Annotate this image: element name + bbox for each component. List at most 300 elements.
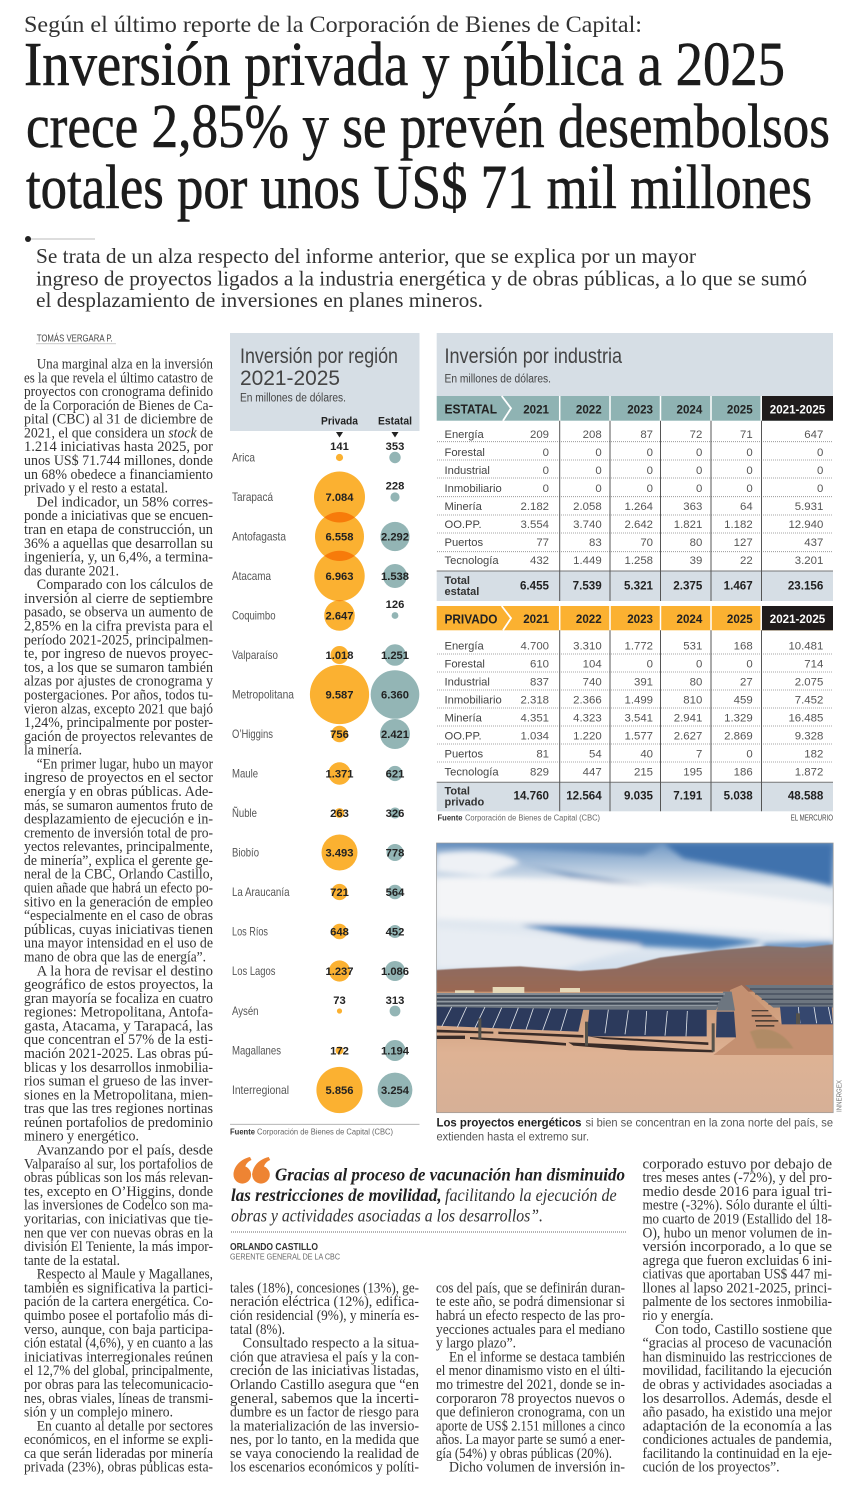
industry source and credit: Corporación de Bienes de Capital (CBC): [465, 813, 600, 823]
industry panel header: Inversión por industria: [444, 345, 622, 368]
table: privado: Inmobiliario: [444, 694, 502, 706]
table: estatal: 363: [683, 501, 702, 513]
table: privado: Total: [444, 786, 470, 798]
table: privado: 12.564: [566, 790, 602, 802]
region panel header: En millones de dólares.: [240, 393, 346, 405]
bubble values: 126: [386, 599, 404, 611]
table: estatal: 0: [746, 447, 753, 459]
table: estatal: 209: [530, 429, 549, 441]
bubble values: 1.086: [381, 966, 409, 978]
table: privado: 740: [583, 676, 602, 688]
table: privado: 80: [690, 676, 702, 688]
article column 1: “especialmente en el caso de obras: [24, 908, 213, 924]
bubble values: 452: [386, 926, 404, 938]
table: estatal: 2021-2025: [770, 403, 826, 416]
photo caption: extienden hasta el extremo sur.: [436, 1130, 589, 1144]
article column 1: quien añade que habrá un efecto po-: [24, 880, 213, 896]
article column 1: te, por ingreso de nuevos proyec-: [24, 646, 213, 662]
article column 1: regiones: Metropolitana, Antofa-: [24, 1005, 213, 1021]
bubble values: 9.587: [326, 689, 354, 701]
region panel header: 2021-2025: [240, 367, 340, 390]
bubble row: Magallanes: [232, 1040, 406, 1061]
table: privado: 391: [634, 676, 653, 688]
table: privado: 2021-2025: [770, 613, 826, 626]
article column 1: Comparado con los cálculos de: [37, 577, 213, 593]
bubble row: Coquimbo: Coquimbo: [232, 608, 276, 622]
bubble row: O'Higgins: O’Higgins: [232, 727, 273, 741]
article column 1: iniciativas interregionales reúnen: [24, 1349, 213, 1365]
article column 1: En cuanto al detalle por sectores: [37, 1418, 213, 1434]
table: privado: 195: [683, 766, 702, 778]
article column 3: corporaron 78 proyectos nuevos o: [436, 1391, 625, 1407]
table: privado: 0: [746, 748, 753, 760]
table: estatal: 0: [543, 483, 549, 495]
article column 1: cremento de inversión total de pro-: [24, 825, 213, 841]
article column 2: ción que atraviesa el país y la con-: [230, 1349, 419, 1365]
article column 1: tran en etapa de construcción, un: [24, 522, 213, 538]
bubble row: Atacama: [232, 551, 407, 601]
quote text: Gracias al proceso de vacunación han disminuido: [275, 1165, 625, 1185]
table: privado: 0: [696, 658, 702, 670]
table: estatal: 1.182: [724, 519, 753, 531]
table: estatal: 0: [817, 483, 823, 495]
table: privado: 447: [583, 766, 602, 778]
article column 1: nen que ver con nuevas obras en la: [24, 1225, 214, 1241]
article column 1: energía y en obras públicas. Ade-: [24, 784, 213, 800]
table: privado: Industrial: [444, 676, 490, 688]
table: privado: 837: [530, 676, 549, 688]
bubble values: 263: [330, 808, 349, 820]
article column 1: también es significativa la partici-: [24, 1280, 213, 1296]
article column 1: desplazamiento de ejecución e in-: [24, 812, 213, 828]
table: estatal: 0: [696, 483, 702, 495]
region source: [230, 1124, 420, 1137]
article column 2: tatal (8%).: [230, 1322, 285, 1338]
bubble values: 564: [386, 887, 405, 899]
icon: quote marks: [234, 1157, 270, 1184]
article column 1: blicas y los desarrollos inmobilia-: [24, 1060, 213, 1076]
table: privado: privado: [444, 797, 485, 809]
bubble values: 3.493: [326, 847, 354, 859]
article column 4: medio desde 2016 para igual tri-: [642, 1184, 832, 1200]
bubble values: 1.251: [381, 650, 409, 662]
table: privado: Forestal: [444, 658, 485, 670]
table: privado: 0: [746, 658, 753, 670]
article column 1: por obras para las telecomunicacio-: [24, 1377, 213, 1393]
article column 1: Una marginal alza en la inversión: [37, 356, 213, 372]
byline: TOMÁS VERGARA P.: [37, 331, 113, 344]
table: estatal: Forestal: [444, 447, 485, 459]
bubble values: 2.292: [381, 531, 409, 543]
deck: Se trata de un alza respecto del informe anterior, que se explica por un mayor: [36, 244, 696, 268]
table: privado: 9.035: [624, 790, 654, 802]
table: estatal: 0: [817, 447, 823, 459]
article column 2: creción de las iniciativas listadas,: [230, 1363, 419, 1379]
article column 4: los desarrollos. Además, desde el: [642, 1391, 832, 1407]
table: privado: 7.452: [795, 694, 823, 706]
article column 1: división El Teniente, la más impor-: [24, 1239, 213, 1255]
table: estatal: OO.PP.: [444, 519, 482, 531]
article column 1: nes, obras viales, líneas de transmi-: [24, 1391, 213, 1407]
table: estatal: 5.321: [624, 580, 654, 592]
table: privado: 829: [530, 766, 549, 778]
article column 1: alzas por ajustes de cronograma y: [24, 674, 214, 690]
bubble values: 7.084: [326, 492, 354, 504]
bubble row: Biobío: Biobío: [232, 846, 259, 860]
table: privado: 1.872: [795, 766, 823, 778]
article column 1: 1.214 iniciativas hasta 2025, por: [24, 439, 213, 455]
table: estatal: 0: [595, 447, 602, 459]
table: privado: 810: [683, 694, 702, 706]
table: estatal: 5.931: [795, 501, 823, 513]
article column 1: gación de proyectos relevantes de: [24, 729, 213, 745]
article column 3: En el informe se destaca también: [449, 1349, 625, 1365]
industry panel header: En millones de dólares.: [444, 374, 551, 386]
bubble row: Maule: [232, 762, 403, 785]
table: privado: 1.329: [724, 712, 753, 724]
bubble row: Maule: Maule: [232, 766, 258, 780]
table: privado: 4.700: [520, 640, 549, 652]
table: privado: 182: [804, 748, 823, 760]
region source: Fuente: [230, 1127, 255, 1137]
article column 1: sitivo en la generación de empleo: [24, 894, 213, 910]
table: estatal: 7.539: [573, 580, 602, 592]
table: estatal: [437, 396, 833, 601]
article column 1: 1,24%, principalmente por poster-: [24, 715, 213, 731]
article column 1: siones en la Metropolitana, mien-: [24, 1087, 213, 1103]
table: estatal: 0: [595, 465, 602, 477]
article column 4: “gracias al proceso de vacunación: [642, 1336, 832, 1352]
article column 1: mano de obra que las de energía”.: [24, 950, 206, 966]
table: privado: 7.191: [673, 790, 703, 802]
article column 1: “En primer lugar, hubo un mayor: [37, 756, 213, 772]
table: privado: Puertos: [444, 748, 483, 760]
article column 1: de la Corporación de Bienes de Ca-: [24, 398, 213, 414]
table: estatal: 2021: [523, 403, 550, 416]
photo caption: [436, 1116, 833, 1144]
article column 3: [436, 1280, 625, 1476]
bubble values: 1.237: [326, 966, 354, 978]
table: privado: 3.310: [573, 640, 602, 652]
article column 1: quimbo posee el portafolio más di-: [24, 1308, 213, 1324]
photo: solar plant in the desert: [436, 843, 833, 1115]
table: estatal: 0: [647, 447, 653, 459]
table: privado: 186: [734, 766, 753, 778]
bubble row: Metropolitana: Metropolitana: [232, 688, 294, 702]
table: privado: 2.366: [573, 694, 602, 706]
article column 3: habrá un efecto respecto de las pro-: [436, 1308, 625, 1324]
bubble row: Valparaíso: Valparaíso: [232, 648, 278, 662]
table: privado: 104: [583, 658, 602, 670]
table: estatal: 23.156: [788, 580, 824, 592]
table: estatal: estatal: [444, 586, 479, 598]
table: privado: 27: [740, 676, 753, 688]
bubble values: 6.963: [326, 571, 354, 583]
article column 1: verso, aunque, con baja participa-: [24, 1322, 213, 1338]
table: estatal: 80: [690, 537, 702, 549]
bubble row: Los Ríos: Los Ríos: [232, 924, 268, 938]
article column 1: Avanzando por el país, desde: [37, 1142, 213, 1158]
article column 4: llones al lapso 2021-2025, princi-: [642, 1280, 832, 1296]
table: privado: 2025: [727, 613, 753, 626]
table: estatal: 70: [640, 537, 653, 549]
article column 4: corporado estuvo por debajo de: [642, 1156, 832, 1172]
table: privado: 2022: [576, 613, 602, 626]
article column 2: los escenarios económicos y políti-: [230, 1460, 419, 1476]
article column 1: ca que serán lideradas por minería: [24, 1446, 214, 1462]
bubble row: O'Higgins: [232, 719, 410, 749]
table: estatal: Inmobiliario: [444, 483, 502, 495]
bubble row: Aysén: Aysén: [232, 1004, 258, 1018]
bubble row: Tarapacá: Tarapacá: [232, 490, 273, 504]
region panel header: Estatal: [378, 416, 412, 428]
article column 1: de minería”, explica el gerente ge-: [24, 853, 213, 869]
table: estatal: 0: [543, 465, 549, 477]
photo caption: Los proyectos energéticos: [436, 1116, 582, 1130]
article column 1: ingreso de proyectos en el sector: [24, 770, 213, 786]
table: privado: 7: [696, 748, 702, 760]
bubble row: Los Lagos: [232, 960, 405, 982]
callout: quote: [230, 1157, 626, 1261]
table: estatal: Industrial: [444, 465, 490, 477]
table: privado: 4.351: [520, 712, 549, 724]
bubble row: Los Ríos: [232, 924, 402, 939]
table: estatal: 71: [740, 429, 753, 441]
article column 4: versión incorporado, a lo que se: [642, 1239, 832, 1255]
table: estatal: 72: [690, 429, 702, 441]
table: estatal: 1.264: [624, 501, 653, 513]
article column 1: gasta, Atacama, y Tarapacá, las: [24, 1018, 214, 1034]
table: privado: 2.318: [520, 694, 549, 706]
table: privado: 714: [804, 658, 823, 670]
table: privado: 14.760: [514, 790, 549, 802]
article column 1: pasado, se observa un aumento de: [24, 605, 213, 621]
article column 2: tales (18%), concesiones (13%), ge-: [230, 1280, 419, 1296]
deck: el desplazamiento de inversiones en planes mineros.: [36, 288, 483, 312]
table: privado: 2.941: [674, 712, 702, 724]
article column 1: yoritarias, con iniciativas que tie-: [24, 1212, 213, 1228]
table: privado: 215: [634, 766, 653, 778]
bubble row: Aysén: [232, 1004, 400, 1018]
table: estatal: 83: [589, 537, 602, 549]
article column 3: Dicho volumen de inversión in-: [449, 1460, 625, 1476]
bubble values: 6.558: [326, 531, 354, 543]
table: estatal: 1.449: [573, 555, 602, 567]
bubble values: 172: [330, 1045, 349, 1057]
table: estatal: Puertos: [444, 537, 483, 549]
article column 1: rios suman el grueso de las inver-: [24, 1074, 213, 1090]
article column 1: tos, a los que se sumaron también: [24, 660, 213, 676]
table: privado: 1.220: [573, 730, 602, 742]
table: estatal: 77: [536, 537, 549, 549]
article column 3: te este año, se podrá dimensionar si: [436, 1294, 625, 1310]
quote attribution: GERENTE GENERAL DE LA CBC: [230, 1251, 340, 1261]
table: privado: 9.328: [795, 730, 823, 742]
table: privado: 610: [530, 658, 549, 670]
table: estatal: Minería: [444, 501, 483, 513]
kicker: Según el último reporte de la Corporación de Bienes de Capital:: [24, 12, 642, 37]
article column 1: es la que revela el último catastro de: [24, 370, 213, 386]
article column 3: que definieron cronograma, con un: [436, 1404, 625, 1420]
table: privado: 2023: [627, 613, 654, 626]
article column 1: más, se sumaron aumentos fruto de: [24, 798, 213, 814]
article column 3: el menor dinamismo visto en el últi-: [436, 1363, 625, 1379]
table: estatal: 2023: [627, 403, 654, 416]
bubble row: Arica: [232, 450, 401, 464]
article column 2: Consultado respecto a la situa-: [242, 1336, 419, 1352]
article column 1: una mayor intensidad en el uso de: [24, 936, 213, 952]
article column 1: Respecto al Maule y Magallanes,: [37, 1267, 213, 1283]
table: privado: 10.481: [788, 640, 823, 652]
article column 1: el 12,7% del global, principalmente,: [24, 1363, 213, 1379]
table: privado: 54: [589, 748, 602, 760]
bubble values: 228: [386, 480, 404, 492]
table: privado: 2021: [523, 613, 550, 626]
table: estatal: 0: [595, 483, 602, 495]
article column 1: ingeniería, y, un 6,4%, a termina-: [24, 550, 213, 566]
table: privado: 531: [683, 640, 702, 652]
quote text: obras y actividades asociadas a los desarrollos”.: [231, 1206, 543, 1226]
table: privado: 1.034: [520, 730, 549, 742]
table: privado: PRIVADO: [444, 612, 498, 626]
article column 4: de obras y actividades asociadas a: [642, 1377, 833, 1393]
bubble row: Biobío: [232, 834, 404, 870]
article column 1: mación 2021-2025. Las obras pú-: [24, 1046, 213, 1062]
bubble values: 1.018: [326, 650, 354, 662]
bubble values: 3.254: [381, 1085, 410, 1097]
bubble row: Arica: Arica: [232, 450, 255, 464]
table: estatal: 3.740: [573, 519, 602, 531]
article column 1: pación de la cartera energética. Co-: [24, 1294, 213, 1310]
article column 1: postergaciones. Por años, todos tu-: [24, 688, 213, 704]
photo caption: si bien se concentran en la zona norte del país, se: [586, 1116, 833, 1130]
bubble row: Los Lagos: Los Lagos: [232, 964, 276, 978]
bubble values: 778: [386, 847, 404, 859]
article column 1: un 68% obedece a financiamiento: [24, 467, 213, 483]
article column 1: das durante 2021.: [24, 563, 119, 579]
article column 4: palmente de los sectores inmobilia-: [642, 1294, 832, 1310]
industry source and credit: [438, 813, 833, 823]
article column 4: rio y energía.: [642, 1308, 714, 1324]
article column 1: 2,85% en la cifra prevista para el: [24, 618, 213, 634]
table: estatal: 87: [640, 429, 653, 441]
article column 4: [642, 1156, 833, 1476]
table: estatal: 0: [543, 447, 549, 459]
quote attribution: ORLANDO CASTILLO: [230, 1242, 318, 1253]
table: estatal: 3.201: [795, 555, 823, 567]
bubble row: Valparaíso: [232, 644, 406, 666]
table: estatal: 2.642: [624, 519, 653, 531]
article column 1: económicos, en el informe se expli-: [24, 1432, 213, 1448]
table: estatal: 39: [690, 555, 702, 567]
article column 4: facilitando la continuidad en la eje-: [642, 1446, 832, 1462]
bubble values: 326: [386, 808, 404, 820]
bubble row: La Araucanía: La Araucanía: [232, 885, 290, 899]
table: estatal: 2025: [727, 403, 753, 416]
title: [24, 31, 830, 222]
bubble values: 313: [386, 995, 404, 1007]
region panel header: Inversión por región: [240, 345, 398, 368]
article column 2: se vaya conociendo la realidad de: [230, 1446, 419, 1462]
article column 4: mestre (-32%). Sólo durante el últi-: [642, 1198, 832, 1214]
bubble values: 756: [330, 729, 349, 741]
table: privado: 5.038: [724, 790, 753, 802]
photo border: [436, 843, 833, 1113]
article column 4: Con todo, Castillo sostiene que: [655, 1322, 832, 1338]
table: estatal: 1.821: [674, 519, 702, 531]
region panel header: [230, 333, 420, 438]
bubble row: La Araucanía: [232, 884, 402, 900]
industry source and credit: Fuente: [438, 813, 463, 823]
bullet rule: [25, 236, 95, 242]
article column 1: gran mayoría se focaliza en cuatro: [24, 991, 213, 1007]
table: estatal: 0: [746, 483, 753, 495]
article column 1: privado y el resto a estatal.: [24, 481, 168, 497]
table: privado: [437, 606, 833, 811]
bubble row: Ñuble: Ñuble: [232, 806, 257, 820]
photo credit: INNERGEX: [836, 1080, 844, 1112]
table: estatal: 0: [647, 483, 653, 495]
table: estatal: 647: [804, 429, 823, 441]
article column 1: obras públicas son los más relevan-: [24, 1170, 213, 1186]
table: estatal: 0: [647, 465, 653, 477]
table: privado: 168: [734, 640, 753, 652]
deck: ingreso de proyectos ligados a la industria energética y de obras públicas, a lo que se sumó: [36, 266, 807, 290]
article column 1: proyectos con cronograma definido: [24, 384, 213, 400]
table: privado: 2024: [677, 613, 703, 626]
article column 1: 2021, el que considera un stock de: [24, 426, 213, 442]
table: estatal: Tecnología: [444, 555, 499, 567]
table: privado: 3.541: [624, 712, 653, 724]
table: estatal: 6.455: [520, 580, 550, 592]
bubble row: Magallanes: Magallanes: [232, 1044, 281, 1058]
article column 1: ción estatal (4,6%), y en cuanto a las: [24, 1336, 213, 1352]
table: estatal: 3.554: [520, 519, 549, 531]
article column 1: tante de la estatal.: [24, 1253, 120, 1269]
table: privado: Energía: [444, 640, 484, 652]
table: estatal: 0: [696, 465, 702, 477]
table: estatal: 1.258: [624, 555, 653, 567]
bubble values: 6.360: [381, 689, 409, 701]
table: estatal: 2.058: [573, 501, 602, 513]
article column 2: [230, 1280, 420, 1476]
table: privado: 16.485: [788, 712, 823, 724]
article column 1: sión y un complejo minero.: [24, 1404, 173, 1420]
article column 3: yecciones actuales para el mediano: [436, 1322, 625, 1338]
table: privado: 1.577: [624, 730, 653, 742]
article column 1: las inversiones de Codelco son ma-: [24, 1198, 213, 1214]
table: estatal: Energía: [444, 429, 484, 441]
table: privado: OO.PP.: [444, 730, 482, 742]
article column 1: 36% a aquellas que desarrollan su: [24, 536, 213, 552]
bubble row: Antofagasta: [232, 512, 410, 561]
quote text: facilitando la ejecución de: [445, 1185, 617, 1205]
article column 1: Valparaíso al sur, los portafolios de: [24, 1156, 213, 1172]
bubble row: Ñuble: [232, 806, 400, 820]
quote attribution: [230, 1242, 340, 1261]
article column 4: han disminuido las restricciones de: [642, 1349, 832, 1365]
bubble row: Metropolitana: [232, 665, 419, 724]
article column 2: nes, por lo tanto, en la medida que: [230, 1432, 419, 1448]
article column 2: la materialización de las inversio-: [230, 1418, 419, 1434]
table: privado: 81: [536, 748, 549, 760]
table: privado: Minería: [444, 712, 483, 724]
table: privado: 1.499: [624, 694, 653, 706]
article column 3: y largo plazo”.: [436, 1336, 516, 1352]
deck: [36, 244, 807, 312]
industry panel header: [437, 333, 833, 396]
article column 1: [24, 356, 214, 1476]
